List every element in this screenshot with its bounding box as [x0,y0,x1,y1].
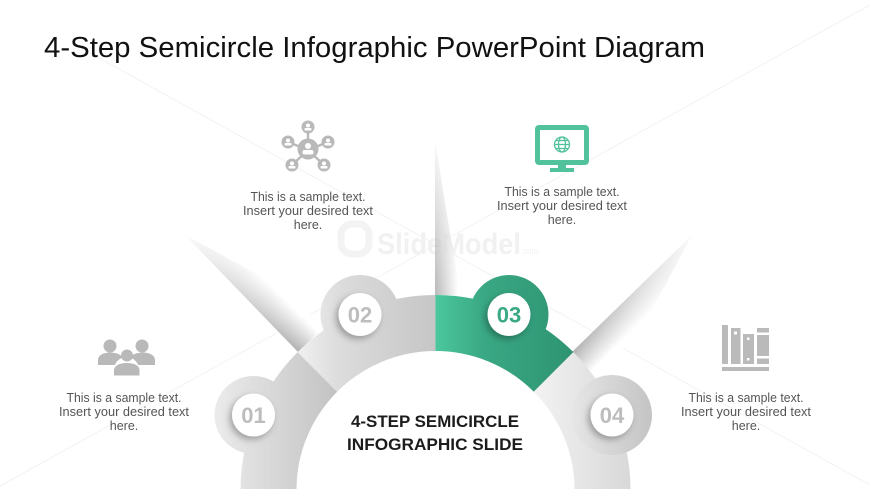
center heading: 4-STEP SEMICIRCLE [351,412,519,431]
beam: center [435,148,456,295]
badge 02: 02 [348,302,372,328]
badge 03: 03 [497,302,521,328]
center heading [347,412,523,454]
title: 4-Step Semicircle Infographic PowerPoint Diagram [44,32,705,64]
text: step 02: Insert your desired text [243,204,374,218]
watermark: SlideModel [377,228,521,261]
text: step 02: This is a sample text. [250,190,366,204]
text: step 04 [681,391,812,433]
text: step 01: here. [110,419,138,433]
beam: left [192,241,316,352]
text: step 01: Insert your desired text [59,405,190,419]
icon: people [98,340,155,376]
icon: network [282,120,334,172]
icon: books [722,325,769,371]
text: step 03 [497,185,628,227]
text: step 02: here. [294,218,322,232]
segment 01 [214,352,337,489]
text: step 01: This is a sample text. [66,391,182,405]
text: step 04: Insert your desired text [681,405,812,419]
text: step 03: here. [548,213,576,227]
segment 04 [534,352,652,489]
text: step 04: This is a sample text. [688,391,804,405]
center heading: INFOGRAPHIC SLIDE [347,435,523,454]
watermark: .com [521,246,538,256]
text: step 03: Insert your desired text [497,199,628,213]
text: step 04: here. [732,419,760,433]
badge 01: 01 [241,403,266,428]
segment 02 [298,275,436,392]
segment 03 [436,275,573,392]
text: step 03: This is a sample text. [504,185,620,199]
badge 04: 04 [600,403,625,428]
beam: right [572,242,686,369]
icon: monitor with globe [538,128,586,172]
text: step 01 [59,391,190,433]
text: step 02 [243,190,374,232]
